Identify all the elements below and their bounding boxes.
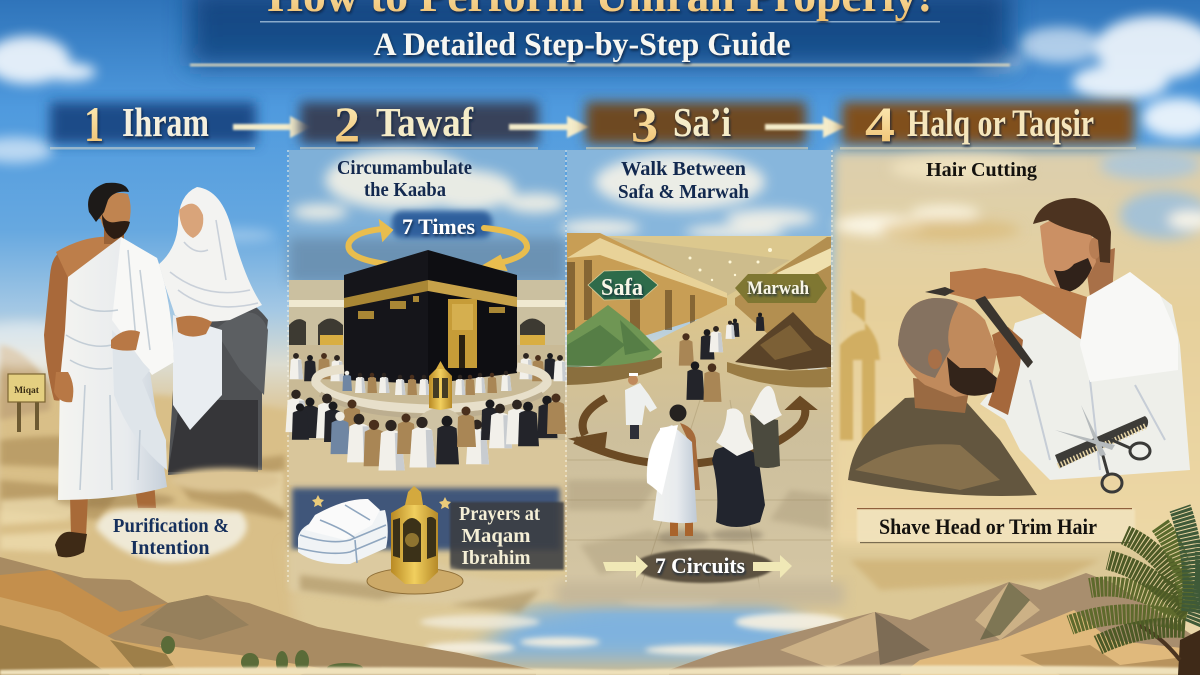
pilgrim in black abaya with white hijab xyxy=(711,408,765,541)
icon: palm tree xyxy=(1070,508,1200,675)
distant dome silhouette xyxy=(840,290,880,440)
arrow 2 to 3 xyxy=(509,116,589,138)
text: prayers at Maqam Ibrahim: Maqam xyxy=(462,525,531,547)
Sa'i corridor scene xyxy=(556,150,844,606)
sign: Marwah: Marwah xyxy=(747,279,810,299)
step 4 header: 4 xyxy=(865,96,895,152)
caption: shave head or trim hair xyxy=(857,508,1135,543)
subtitle: walk between Safa and Marwah: Safa & Marwah xyxy=(618,181,749,203)
arrows: circling the Kaaba xyxy=(348,221,527,270)
lower prayers band xyxy=(289,488,565,612)
step 2 header: 2 xyxy=(334,96,360,152)
icon: Maqam Ibrahim shrine xyxy=(416,361,464,448)
woman in hijab and abaya xyxy=(158,187,280,492)
icon: Miqat signpost: Miqat xyxy=(14,386,40,396)
subtitle: hair cutting: Hair Cutting xyxy=(926,159,1037,181)
pilgrim in white robe seen from behind xyxy=(647,404,710,544)
step 3 header: Sa’i xyxy=(673,99,731,145)
subtitle: walk between Safa and Marwah xyxy=(618,158,749,203)
inner row of pilgrims at Kaaba base xyxy=(342,371,512,395)
customer having head shaved xyxy=(848,298,1037,496)
arrow 3 to 4 xyxy=(765,116,845,138)
barber xyxy=(950,198,1190,480)
step 4 header: Halq or Taqsir xyxy=(907,102,1094,145)
step 3 header xyxy=(586,96,808,152)
step 3 header: 3 xyxy=(631,96,658,152)
panel dividers xyxy=(288,150,832,585)
distant pilgrims xyxy=(679,313,764,402)
brown Marwah mound xyxy=(727,312,831,387)
clouds and golden sky xyxy=(835,150,1200,241)
subtitle: circumambulate the Kaaba: Circumambulate xyxy=(337,157,472,179)
text: prayers at Maqam Ibrahim xyxy=(459,503,540,569)
step 1 header: 1 xyxy=(84,96,104,152)
subtitle: circumambulate the Kaaba xyxy=(337,157,472,201)
panel 3: Sa'i xyxy=(556,150,844,606)
badge: 7 circuits xyxy=(603,549,792,583)
icon: comb and scissors xyxy=(1055,405,1150,492)
callout: purification and intention: Intention xyxy=(130,537,210,559)
icon: golden maqam lantern xyxy=(367,486,463,594)
sign: Safa: Safa xyxy=(601,275,643,301)
label: 7 times xyxy=(392,211,492,239)
label: 7 times: 7 Times xyxy=(402,214,475,239)
icon: Miqat signpost xyxy=(8,374,45,432)
text: prayers at Maqam Ibrahim: Prayers at xyxy=(459,503,540,525)
subtitle: A Detailed Step-by-Step Guide xyxy=(374,27,790,63)
panel 2: Tawaf xyxy=(286,150,567,612)
subtitle: circumambulate the Kaaba: the Kaaba xyxy=(364,179,446,201)
icon: stars xyxy=(312,495,451,509)
subtitle: walk between Safa and Marwah: Walk Between xyxy=(621,158,746,180)
callout: purification and intention xyxy=(96,509,247,562)
arrow: circuit around the hall xyxy=(572,397,815,464)
step 1 header xyxy=(50,96,256,152)
bottom sky, clouds, mountains and sand xyxy=(0,545,1200,675)
badge: 7 circuits: 7 Circuits xyxy=(655,553,745,578)
step 2 header: Tawaf xyxy=(376,99,474,145)
circular wall around Kaaba xyxy=(316,367,547,416)
text: prayers at Maqam Ibrahim: Ibrahim xyxy=(462,547,531,569)
pilgrim in white coat xyxy=(625,373,657,439)
step 4 header xyxy=(840,96,1136,152)
crowd of pilgrims xyxy=(286,390,566,470)
panel 1: Ihram xyxy=(8,183,280,562)
step 2 header xyxy=(300,96,538,152)
title banner xyxy=(190,0,1010,66)
back rows of pilgrims xyxy=(290,353,567,381)
pilgrim with white hijab further ahead xyxy=(750,386,782,468)
Kaaba xyxy=(344,250,517,384)
step 1 header: Ihram xyxy=(122,99,209,145)
callout: purification and intention: Purification & xyxy=(113,515,229,537)
Tawaf scene backdrop xyxy=(289,150,565,485)
green Safa mound xyxy=(567,305,662,385)
panel 4: Halq or Taqsir xyxy=(835,150,1200,675)
icon: folded ihram towels xyxy=(298,499,388,564)
sign: Marwah xyxy=(735,274,827,303)
caption: shave head or trim hair: Shave Head or Trim Hair xyxy=(879,514,1097,539)
icon: hair clipper xyxy=(925,287,1033,368)
sign: Safa xyxy=(588,270,658,301)
arrow 1 to 2 xyxy=(233,116,312,138)
man in ihram xyxy=(44,183,175,557)
